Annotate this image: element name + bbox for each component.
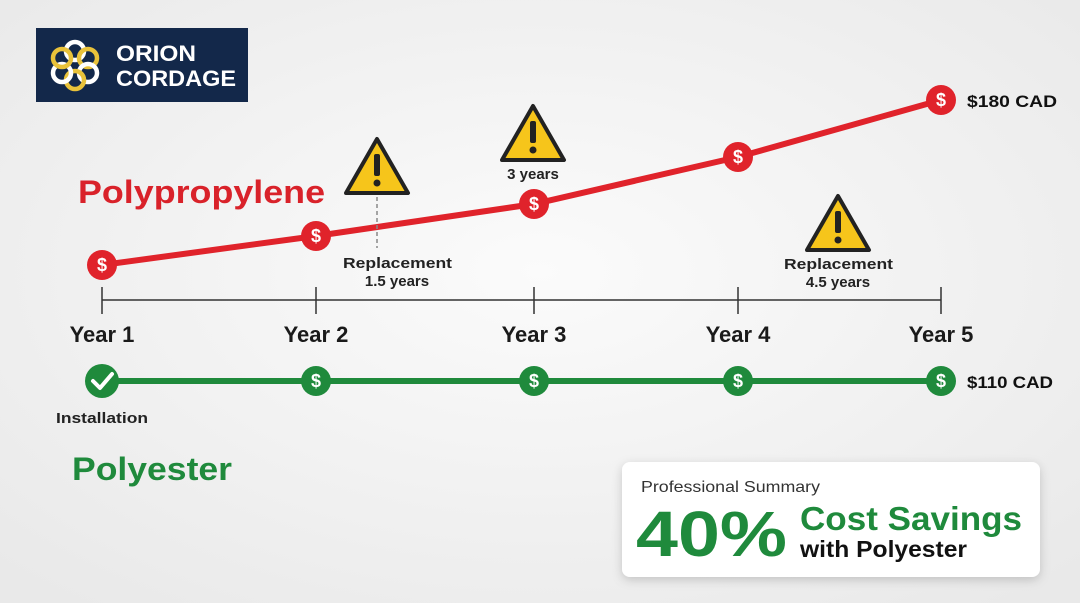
warning 1.5 years: 1.5 years — [365, 273, 429, 290]
red cost line: $ — [311, 226, 321, 246]
logo: CORDAGE — [116, 66, 236, 91]
timeline axis: Year 1 — [70, 322, 134, 347]
timeline axis: Year 5 — [909, 322, 973, 347]
green cost line: $ — [311, 371, 321, 391]
red cost line: $ — [97, 255, 107, 275]
warning 4.5 years: 4.5 years — [806, 274, 870, 291]
summary card: Professional Summary — [641, 479, 820, 496]
green cost line: $ — [529, 371, 539, 391]
warning 4.5 years — [784, 196, 893, 291]
summary card — [622, 462, 1040, 577]
warning 1.5 years: Replacement — [343, 255, 452, 272]
icon: knot — [53, 42, 97, 89]
red cost line: $ — [936, 90, 946, 110]
timeline axis: Year 3 — [502, 322, 566, 347]
red cost line: $180 CAD — [967, 92, 1057, 111]
red cost line — [87, 85, 1057, 280]
timeline axis: Year 2 — [284, 322, 348, 347]
heading: Polypropylene: Polypropylene — [78, 174, 325, 210]
warning 3 years: 3 years — [507, 166, 559, 183]
red cost line: $ — [529, 194, 539, 214]
warning 1.5 years — [343, 139, 452, 290]
summary card: Cost Savings — [800, 500, 1022, 537]
warning 3 years — [502, 106, 564, 183]
green cost line: $ — [936, 371, 946, 391]
green cost line: Installation — [56, 410, 148, 427]
green cost line — [56, 364, 1053, 427]
warning 4.5 years: Replacement — [784, 256, 893, 273]
summary card: 40% — [636, 498, 787, 570]
timeline axis: Year 4 — [706, 322, 771, 347]
timeline axis — [70, 287, 973, 347]
green cost line: $ — [733, 371, 743, 391]
red cost line: $ — [733, 147, 743, 167]
logo: ORION — [116, 41, 196, 66]
heading: Polyester: Polyester — [72, 451, 232, 487]
summary card: with Polyester — [799, 536, 967, 562]
green cost line: $110 CAD — [967, 373, 1053, 392]
logo — [36, 28, 248, 102]
